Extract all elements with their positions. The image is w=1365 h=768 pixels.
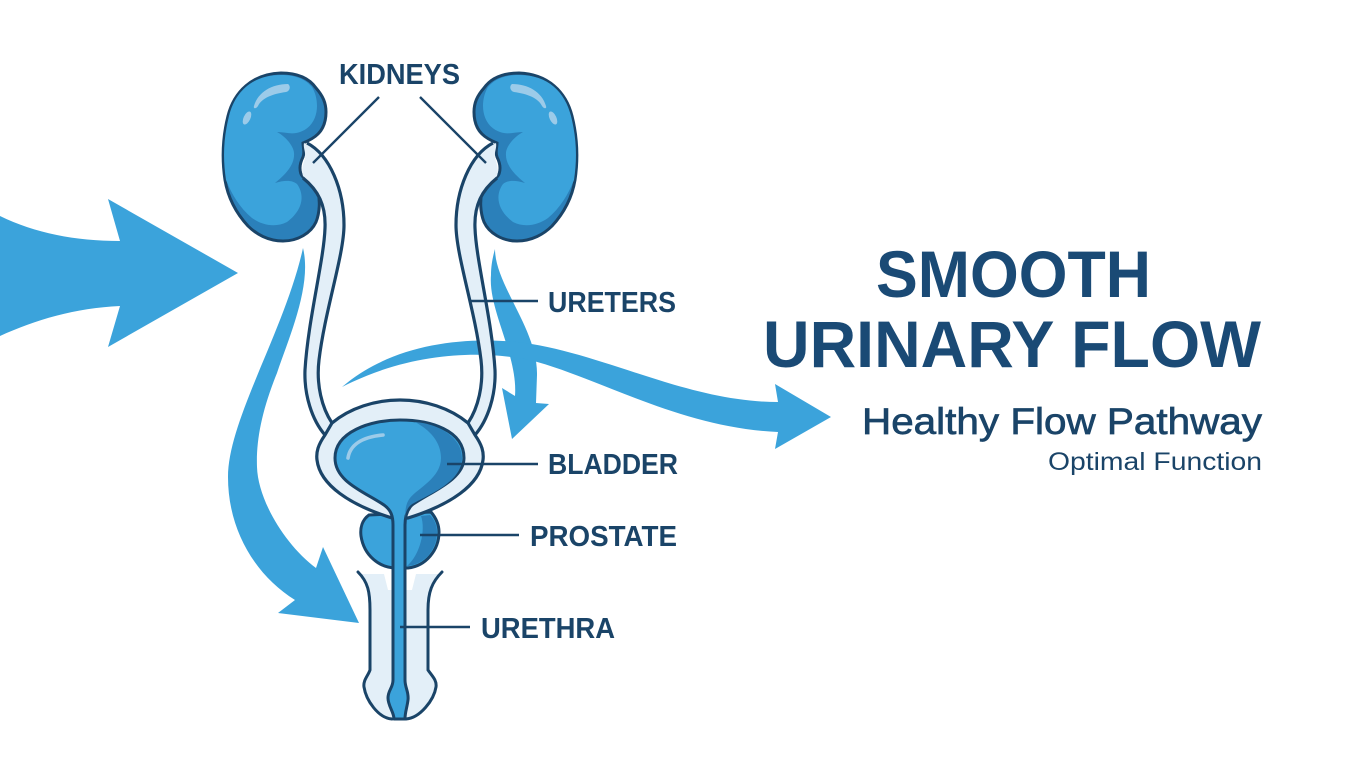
subtitle: Healthy Flow Pathway — [862, 401, 1263, 442]
caption: Optimal Function — [1048, 448, 1262, 476]
leader lines — [313, 97, 538, 627]
right kidney — [474, 73, 577, 241]
arrow: large inflow from left — [0, 199, 238, 347]
arrow: flow toward title — [342, 341, 831, 449]
label: kidneys: KIDNEYS — [339, 59, 460, 91]
penis outline — [358, 572, 442, 719]
bladder — [317, 400, 483, 719]
label: bladder: BLADDER — [548, 449, 678, 481]
label: ureters: URETERS — [548, 287, 676, 319]
arrow: right descending flow — [491, 249, 549, 439]
left kidney — [223, 73, 326, 241]
prostate — [361, 512, 439, 568]
label: prostate: PROSTATE — [530, 521, 677, 553]
title line 2: URINARY FLOW — [763, 307, 1262, 381]
right ureter — [456, 143, 498, 435]
title line 1: SMOOTH — [876, 237, 1151, 311]
arrow: left descending flow — [228, 248, 359, 623]
left ureter — [302, 143, 344, 435]
label: urethra: URETHRA — [481, 613, 615, 645]
